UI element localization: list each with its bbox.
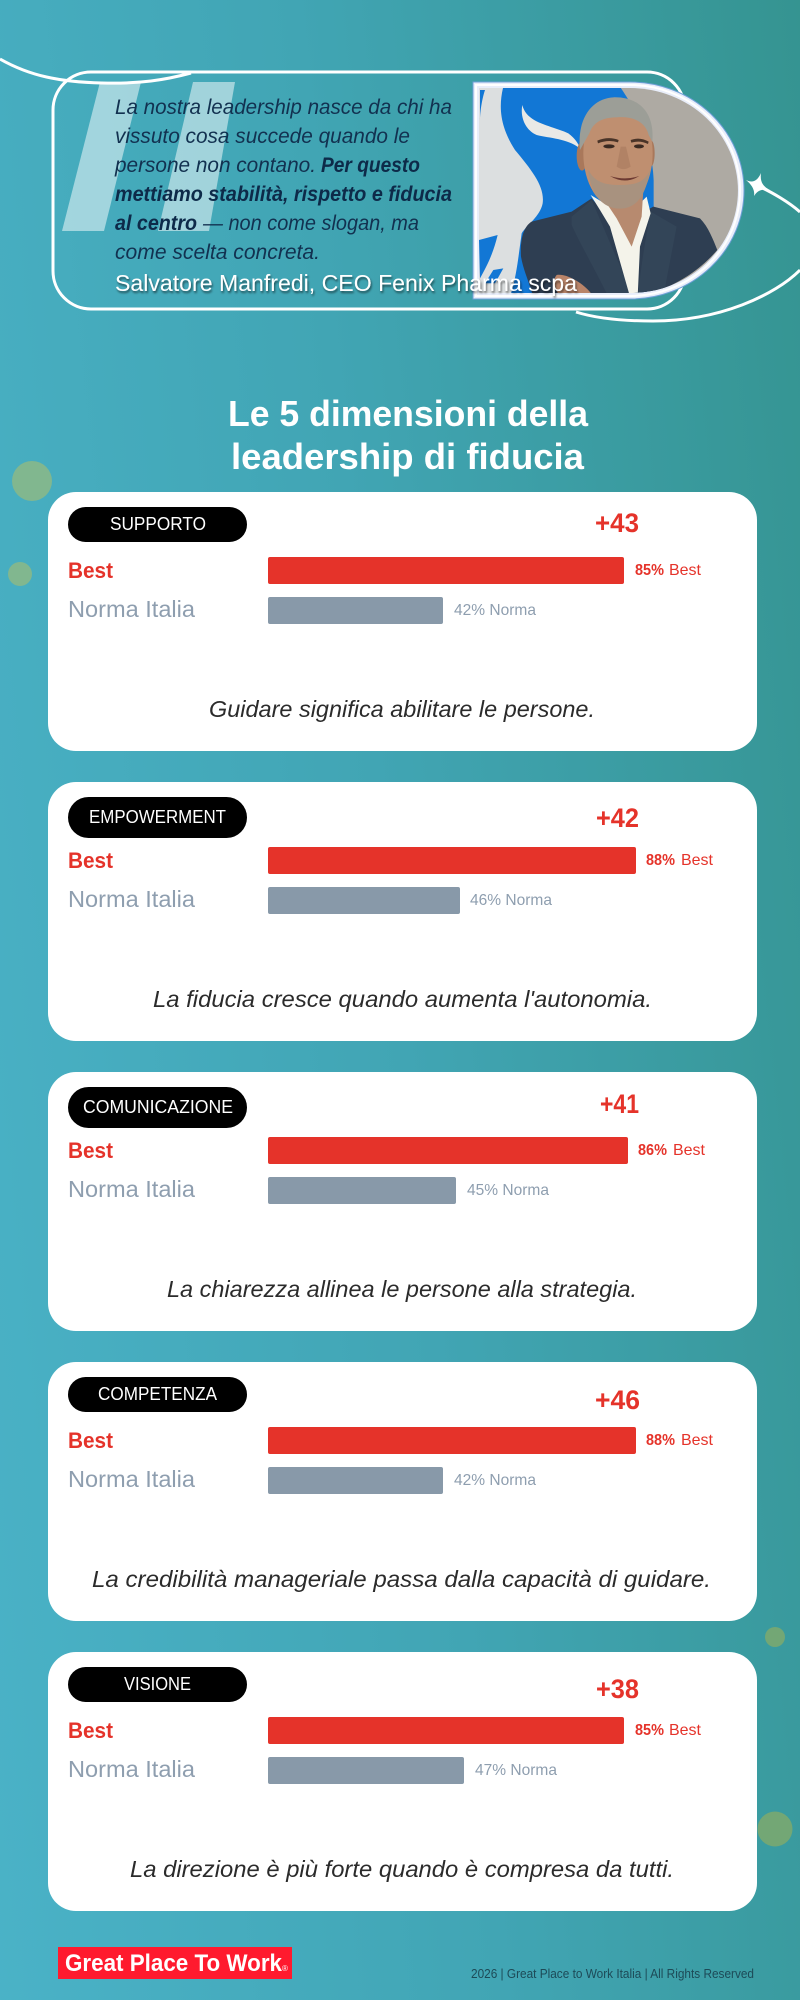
- pill: SUPPORTO: [68, 507, 247, 542]
- quote text: La nostra leadership nasce da chi ha: [115, 96, 452, 119]
- pill: COMUNICAZIONE: [68, 1087, 247, 1128]
- row: Norma Italia 46%: Norma Italia: [68, 886, 195, 912]
- row: Norma Italia 42%: 42% Norma: [454, 602, 536, 619]
- delta: +46: +46: [595, 1385, 640, 1415]
- pill: EMPOWERMENT: EMPOWERMENT: [89, 807, 226, 827]
- panel: CEO quote: [0, 59, 800, 321]
- panel: COMUNICAZIONE: [48, 1072, 757, 1331]
- takeaway: Guidare significa abilitare le persone.: [209, 696, 595, 722]
- row: Norma Italia 46%: 46% Norma: [470, 892, 552, 909]
- row: Best 88%: [68, 847, 714, 874]
- pill: SUPPORTO: SUPPORTO: [110, 514, 206, 534]
- panel: EMPOWERMENT: [48, 782, 757, 1041]
- row: Best 85%: Best: [68, 1718, 114, 1743]
- panel: COMPETENZA: [48, 1362, 757, 1621]
- row: Best 88%: Best: [68, 848, 114, 873]
- row: Best 88%: 88%: [646, 1432, 675, 1449]
- row: Best 88%: [68, 1427, 714, 1454]
- delta: +42: +42: [596, 803, 639, 833]
- icon: sparkle star: [746, 173, 770, 196]
- row: Norma Italia 42%: Norma Italia: [68, 1466, 195, 1492]
- quote text: vissuto cosa succede quando le: [115, 125, 410, 148]
- takeaway: La credibilità manageriale passa dalla capacità di guidare.: [92, 1566, 711, 1592]
- pill: VISIONE: [68, 1667, 247, 1702]
- row: Norma Italia 47%: [68, 1756, 557, 1784]
- quote attribution: Salvatore Manfredi, CEO Fenix Pharma scpa: [115, 270, 577, 296]
- row: Norma Italia 45%: 45% Norma: [467, 1182, 549, 1199]
- row: Best 88%: Best: [681, 852, 714, 869]
- curved line: bottom right: [576, 186, 800, 321]
- quote text: come scelta concreta.: [115, 241, 320, 264]
- row: Best 85%: 85%: [635, 1722, 664, 1739]
- row: Best 85%: Best: [669, 1722, 702, 1739]
- pill: COMPETENZA: COMPETENZA: [98, 1384, 217, 1404]
- decorative circles: left: [8, 461, 52, 586]
- row: Best 85%: [68, 1717, 702, 1744]
- delta: +38: +38: [596, 1674, 639, 1704]
- row: Best 85%: [68, 557, 702, 584]
- decorative circles: right: [758, 1627, 792, 1846]
- row: Norma Italia 47%: 47% Norma: [475, 1762, 557, 1779]
- row: Best 88%: 88%: [646, 852, 675, 869]
- pill: COMPETENZA: [68, 1377, 247, 1412]
- row: Norma Italia 47%: Norma Italia: [68, 1756, 195, 1782]
- quote text: — non come slogan, ma: [202, 212, 419, 235]
- title: Le 5 dimensioni della: [228, 393, 589, 434]
- quote text: [114, 96, 452, 264]
- row: Norma Italia 46%: [68, 886, 552, 914]
- row: Norma Italia 42%: [68, 1466, 536, 1494]
- row: Best 85%: Best: [68, 558, 114, 583]
- row: Best 88%: Best: [681, 1432, 714, 1449]
- panel: SUPPORTO: [48, 492, 757, 751]
- title: [228, 393, 589, 477]
- row: Best 88%: Best: [68, 1428, 114, 1453]
- takeaway: La chiarezza allinea le persone alla strategia.: [167, 1276, 637, 1302]
- pill: VISIONE: VISIONE: [124, 1674, 191, 1694]
- quote text: Per questo: [321, 154, 420, 177]
- quote text: al centro: [115, 212, 197, 235]
- logo: Great Place To Work: ®: [282, 1964, 288, 1973]
- curved line: top left: [0, 59, 191, 83]
- row: Best 86%: [68, 1137, 706, 1164]
- quote text: mettiamo stabilità, rispetto e fiducia: [115, 183, 452, 206]
- pill: EMPOWERMENT: [68, 797, 247, 838]
- title: leadership di fiducia: [231, 436, 585, 477]
- row: Norma Italia 42%: [68, 596, 536, 624]
- row: Norma Italia 42%: Norma Italia: [68, 596, 195, 622]
- row: Norma Italia 42%: 42% Norma: [454, 1472, 536, 1489]
- delta: +41: +41: [600, 1089, 639, 1119]
- photo: portrait of Salvatore Manfredi: [477, 87, 743, 300]
- pill: COMUNICAZIONE: COMUNICAZIONE: [83, 1097, 233, 1117]
- panel: VISIONE: [48, 1652, 757, 1911]
- row: Best 85%: Best: [669, 562, 702, 579]
- quote text: persone non contano.: [114, 154, 316, 177]
- row: Best 86%: Best: [673, 1142, 706, 1159]
- delta: +43: +43: [595, 508, 639, 538]
- row: Best 86%: 86%: [638, 1142, 667, 1159]
- icon: quotation mark: [62, 82, 235, 231]
- takeaway: La fiducia cresce quando aumenta l'autonomia.: [153, 986, 652, 1012]
- row: Norma Italia 45%: Norma Italia: [68, 1176, 195, 1202]
- logo: Great Place To Work: Great Place To Work: [65, 1950, 283, 1977]
- row: Best 85%: 85%: [635, 562, 664, 579]
- footer copyright: 2026 | Great Place to Work Italia | All Rights Reserved: [471, 1966, 754, 1981]
- row: Norma Italia 45%: [68, 1176, 549, 1204]
- row: Best 86%: Best: [68, 1138, 114, 1163]
- panel outline: [53, 72, 685, 309]
- photo frame: [473, 82, 744, 299]
- takeaway: La direzione è più forte quando è compresa da tutti.: [130, 1856, 674, 1882]
